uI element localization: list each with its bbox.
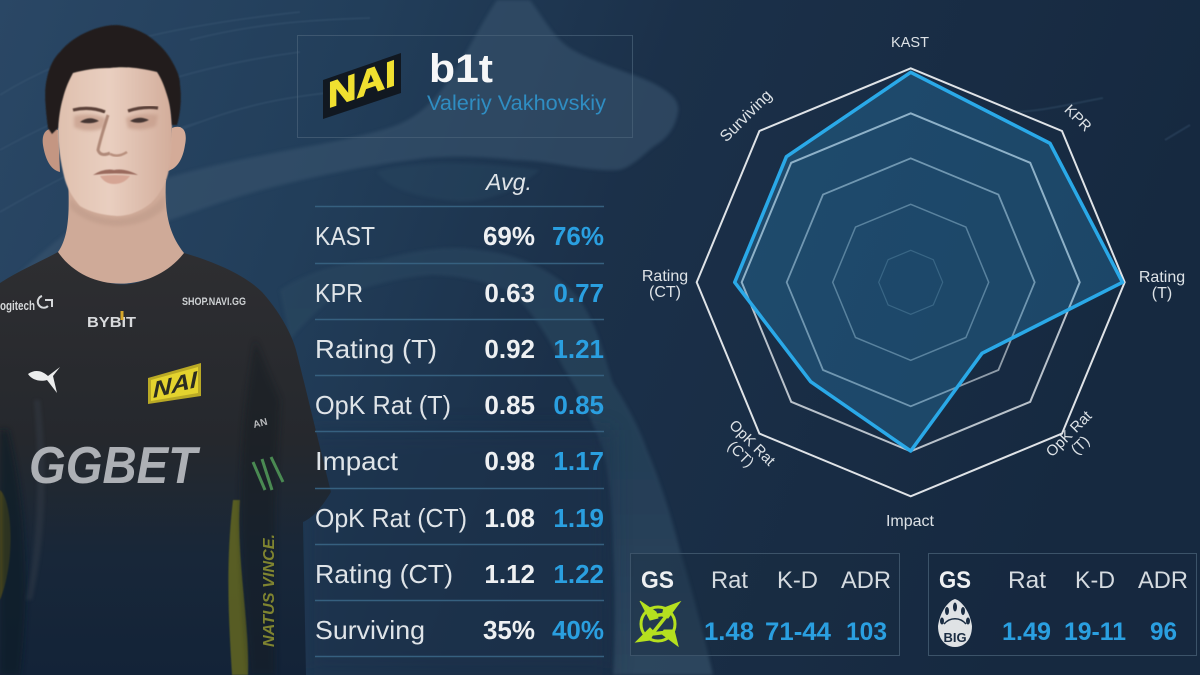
player photo: AN xyxy=(252,417,269,431)
icon: BIG paw logo: BIG xyxy=(943,630,967,645)
group stage panel: NIP: ADR xyxy=(841,567,891,594)
group stage panel: BIG xyxy=(928,554,1196,656)
shirt xyxy=(0,252,331,675)
player photo: GGBET xyxy=(29,437,201,495)
axis labels: (T) xyxy=(1152,285,1172,302)
row: KPR: 0.77 xyxy=(553,278,604,308)
icon: BIG paw logo xyxy=(938,599,972,647)
row: Surviving xyxy=(315,615,604,645)
row: OpK Rat (CT): 1.08 xyxy=(484,503,535,533)
player data polygon xyxy=(735,72,1122,451)
player name: b1t xyxy=(429,47,493,91)
neck xyxy=(58,180,184,284)
face xyxy=(58,63,172,216)
real name: Valeriy Vakhovskiy xyxy=(427,92,607,115)
row: Impact: Impact xyxy=(315,446,399,476)
group stage panel: NIP: GS xyxy=(641,567,674,594)
axis labels: Surviving xyxy=(717,87,776,146)
row: KPR: 0.63 xyxy=(484,278,535,308)
icon: NIP logo xyxy=(636,601,680,646)
row: Rating (CT): 1.22 xyxy=(553,559,604,589)
row: KPR xyxy=(315,278,604,308)
row: OpK Rat (T): OpK Rat (T) xyxy=(315,390,451,420)
axis labels: Rating xyxy=(1139,269,1185,286)
row: Surviving: 35% xyxy=(483,615,535,645)
row: Surviving: 40% xyxy=(552,615,604,645)
axis labels: (CT) xyxy=(649,284,681,301)
group stage panel: BIG: 1.49 xyxy=(1002,618,1051,646)
row: Rating (T): 0.92 xyxy=(484,334,535,364)
icon: NAVI logo: NAI xyxy=(328,52,396,116)
group stage panel: BIG: 19-11 xyxy=(1064,618,1126,646)
axis labels: (T) xyxy=(1068,433,1093,458)
axis labels: Impact xyxy=(886,513,935,530)
row: Rating (T) xyxy=(315,334,604,364)
row: Impact xyxy=(315,446,604,476)
eye sockets xyxy=(74,114,158,131)
row dividers xyxy=(315,206,604,656)
header box xyxy=(298,36,632,138)
axis labels: Rating xyxy=(642,268,688,285)
group stage panel: BIG: Rat xyxy=(1008,567,1046,594)
player photo: BYBIT xyxy=(87,314,136,331)
row: KPR: KPR xyxy=(315,278,363,308)
axis labels: KAST xyxy=(891,34,929,51)
mouth xyxy=(93,170,138,175)
group stage panel: BIG: K-D xyxy=(1075,567,1115,594)
lower arc swirl xyxy=(280,248,713,675)
sleeve shading and stripes xyxy=(228,500,248,675)
row: Rating (CT) xyxy=(315,559,604,589)
axis labels xyxy=(642,34,1185,530)
upper swirl band and blob xyxy=(0,0,678,345)
axis labels: OpK Rat xyxy=(1043,407,1096,460)
column header: Avg. xyxy=(484,169,532,195)
eyebrows xyxy=(73,107,158,112)
group stage panel: NIP: 103 xyxy=(846,618,887,646)
eyes xyxy=(80,118,149,123)
row: Rating (T): Rating (T) xyxy=(315,334,437,364)
group stage panel: BIG: 96 xyxy=(1150,618,1177,646)
group stage panel: NIP: 71-44 xyxy=(765,618,831,646)
row: KAST: 76% xyxy=(552,221,604,251)
ears xyxy=(43,129,60,172)
row: KAST: 69% xyxy=(483,221,535,251)
fine streaks xyxy=(0,12,370,212)
player photo: NAI xyxy=(153,366,198,403)
axis labels: OpK Rat xyxy=(726,417,779,470)
group stage panel: NIP: K-D xyxy=(777,567,818,594)
row: KAST xyxy=(315,221,604,251)
row: Rating (CT): Rating (CT) xyxy=(315,559,453,589)
row: OpK Rat (CT): 1.19 xyxy=(553,503,604,533)
group stage panel: BIG: ADR xyxy=(1138,567,1188,594)
group stage panel: NIP: Rat xyxy=(711,567,748,594)
bottom table tone xyxy=(305,430,612,675)
row: OpK Rat (T): 0.85 xyxy=(553,390,604,420)
axis labels: (CT) xyxy=(724,438,757,471)
row: Rating (CT): 1.12 xyxy=(484,559,535,589)
player photo xyxy=(0,25,331,675)
row: OpK Rat (CT): OpK Rat (CT) xyxy=(315,503,467,533)
row: Rating (T): 1.21 xyxy=(553,334,604,364)
stats table xyxy=(315,169,604,656)
group stage panel: NIP: 1.48 xyxy=(704,618,754,646)
inner light swirl below header xyxy=(377,163,540,201)
row: OpK Rat (T) xyxy=(315,390,604,420)
group stage panel: BIG: GS xyxy=(939,567,971,594)
row: Impact: 0.98 xyxy=(484,446,535,476)
hair xyxy=(45,25,181,134)
row: OpK Rat (T): 0.85 xyxy=(484,390,535,420)
row: KAST: KAST xyxy=(315,221,375,251)
row: Surviving: Surviving xyxy=(315,615,425,645)
row: Impact: 1.17 xyxy=(553,446,604,476)
nose xyxy=(98,115,110,155)
group stage panel: NIP xyxy=(630,554,900,656)
axis labels: KPR xyxy=(1061,101,1095,135)
player photo: SHOP.NAVI.GG xyxy=(182,296,246,308)
player photo: NATUS VINCE. xyxy=(261,534,278,647)
grid rings xyxy=(697,68,1125,496)
shirt logos: ogitech xyxy=(0,298,35,313)
row: OpK Rat (CT) xyxy=(315,503,604,533)
radar chart xyxy=(642,34,1185,530)
